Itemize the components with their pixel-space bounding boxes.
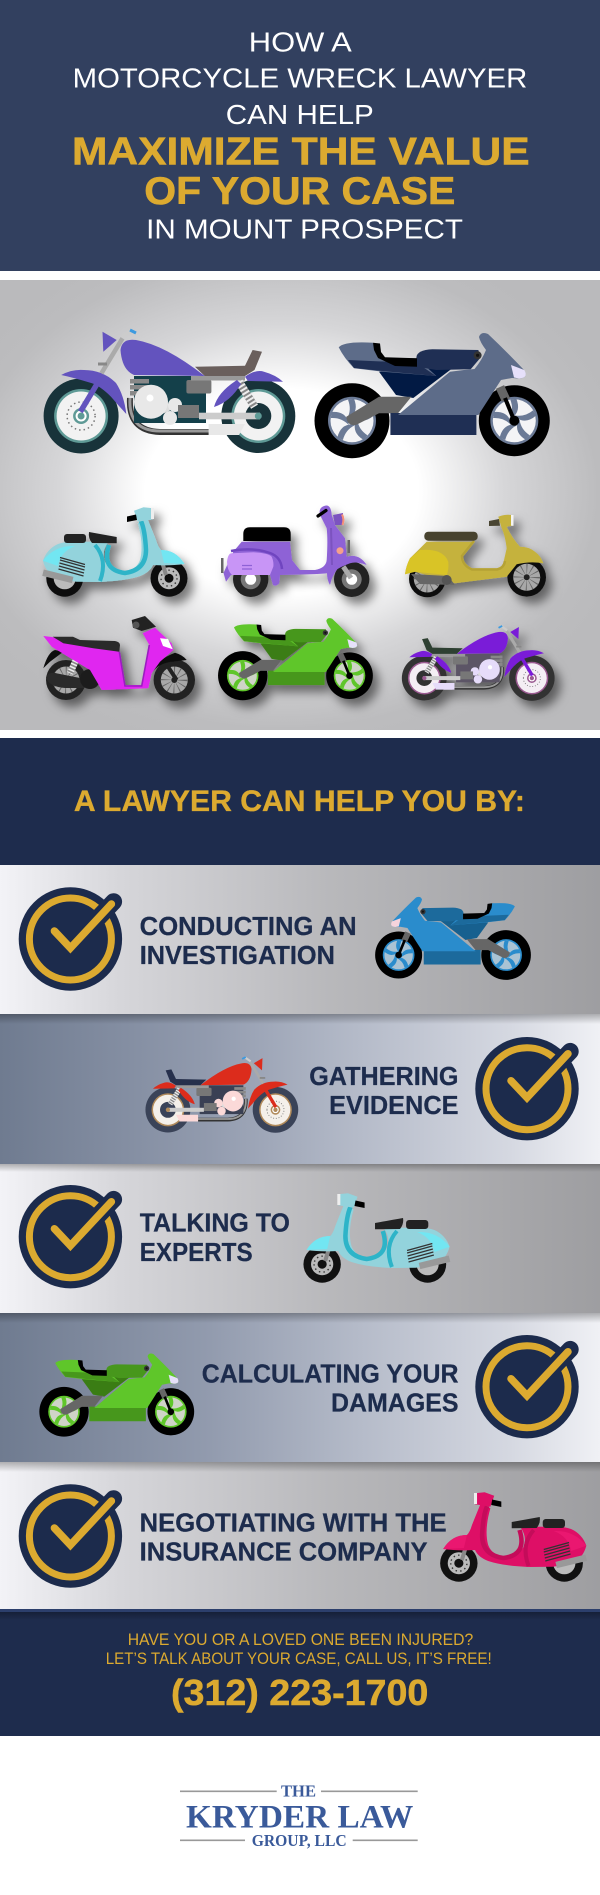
icon: check badge: [19, 1185, 122, 1288]
text: step 3: TALKING TO: [140, 1210, 290, 1238]
title: gold highlight: OF YOUR CASE: [144, 170, 455, 213]
text: call to action: HAVE YOU OR A LOVED ONE BEEN INJURED?: [128, 1630, 473, 1649]
text: step 5: NEGOTIATING WITH THE: [140, 1510, 447, 1538]
panel: call to action footer: [0, 1609, 600, 1736]
motorcycle: violet cruiser: [402, 626, 555, 701]
text: step 1: CONDUCTING AN: [140, 913, 357, 941]
panel: step 5 negotiating with the insurance company: [0, 1462, 600, 1609]
icon: check badge: [475, 1335, 579, 1438]
text: step 5: INSURANCE COMPANY: [140, 1539, 427, 1567]
text: step 4: CALCULATING YOUR: [202, 1361, 458, 1389]
logo: the kryder law group: GROUP, LLC: [252, 1831, 347, 1850]
logo: the kryder law group: [180, 1782, 418, 1850]
panel: step 4 calculating your damages: [0, 1313, 600, 1462]
title: intro lines: [73, 27, 527, 130]
text: step 2: [309, 1063, 458, 1120]
motorcycle: purple cruiser: [44, 330, 295, 454]
icon: check badge: [19, 1484, 122, 1588]
motorcycle: blue sport bike: [375, 897, 531, 980]
panel: step 3 talking to experts: [0, 1164, 600, 1313]
phone number: (312) 223-1700: [171, 1672, 428, 1713]
panel: motorcycle gallery: [0, 280, 600, 730]
panel: header: [0, 0, 600, 271]
text: step 4: DAMAGES: [331, 1390, 458, 1418]
title: gold highlight: [72, 130, 530, 213]
scooter: pink: [440, 1492, 586, 1582]
scooter: yellow: [405, 515, 546, 597]
motorcycle: green sport bike: [39, 1354, 194, 1437]
panel: step 2 gathering evidence: [0, 1014, 600, 1164]
text: step 4: [202, 1361, 458, 1418]
panel: step 1 conducting an investigation: [0, 865, 600, 1014]
text: step 1: INVESTIGATION: [140, 942, 335, 970]
scooter: magenta: [43, 616, 195, 701]
heading band: a lawyer can help: A LAWYER CAN HELP YOU BY:: [74, 785, 525, 818]
text: step 2: GATHERING: [309, 1063, 458, 1091]
text: step 3: EXPERTS: [140, 1239, 253, 1267]
text: step 1: [140, 913, 357, 970]
scooter: light blue: [303, 1193, 450, 1283]
motorcycle: green sport bike: [218, 618, 373, 700]
title: intro lines: CAN HELP: [226, 99, 374, 130]
title: intro lines: MOTORCYCLE WRECK LAWYER: [73, 63, 527, 94]
text: call to action: LET’S TALK ABOUT YOUR CASE, CALL US, IT’S FREE!: [106, 1649, 492, 1668]
title: intro lines: HOW A: [249, 27, 352, 58]
scooter: light blue: [43, 507, 188, 597]
logo: the kryder law group: KRYDER LAW: [186, 1799, 413, 1835]
icon: check badge: [19, 887, 122, 991]
text: step 5: [140, 1510, 447, 1567]
motorcycle: red cruiser: [145, 1057, 298, 1133]
text: step 2: EVIDENCE: [329, 1092, 458, 1120]
title: location: IN MOUNT PROSPECT: [146, 213, 463, 244]
text: step 3: [140, 1210, 290, 1267]
icon: check badge: [475, 1037, 579, 1140]
motorcycle: navy sport bike: [314, 333, 550, 458]
scooter: purple: [221, 505, 369, 597]
heading band: a lawyer can help: [0, 738, 600, 865]
text: call to action: [106, 1630, 492, 1668]
logo: the kryder law group: THE: [281, 1782, 316, 1801]
title: gold highlight: MAXIMIZE THE VALUE: [72, 130, 530, 173]
